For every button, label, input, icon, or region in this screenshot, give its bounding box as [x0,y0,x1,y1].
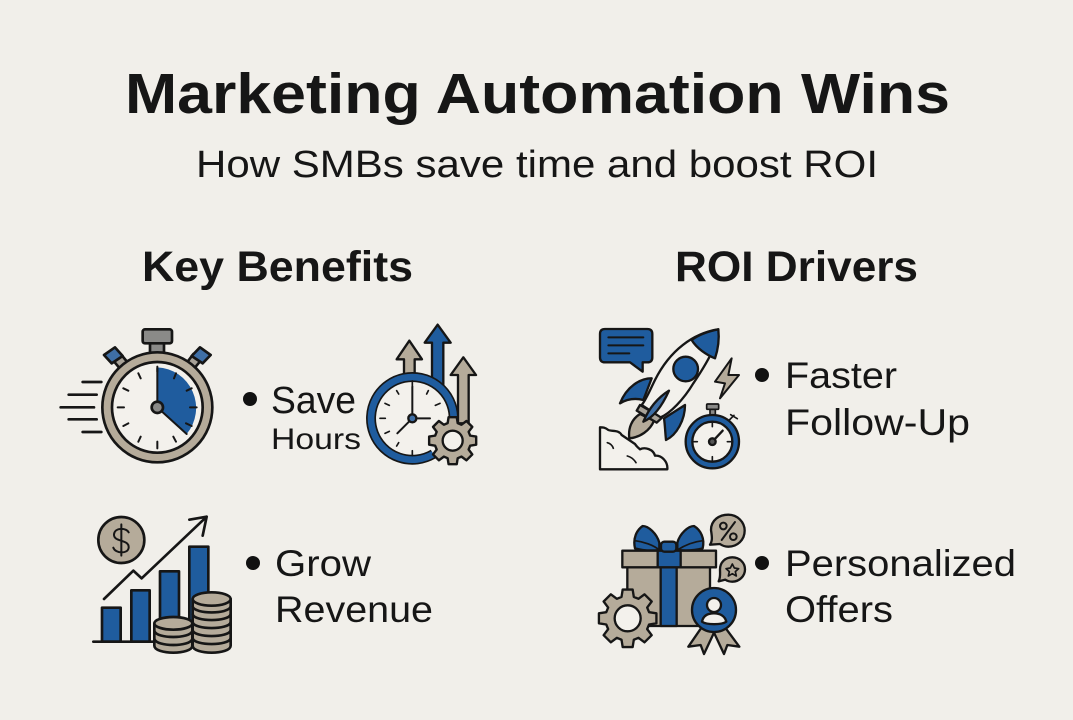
label: personalized: Personalized [785,543,1016,584]
label: grow: Grow [275,543,371,584]
icon: gift with gear and badge [599,515,745,654]
icon: stopwatch [61,329,212,462]
title: Marketing Automation Wins [125,62,950,126]
label: offers: Offers [785,589,893,630]
heading: key benefits: Key Benefits [142,243,413,291]
icon: revenue chart with coins [93,517,231,653]
heading: ROI drivers: ROI Drivers [675,243,918,291]
bullet: save hours [243,392,257,406]
label: follow-up: Follow-Up [785,402,970,443]
bullet: personalized offers [755,556,769,570]
bullet: faster follow-up [755,368,769,382]
label: revenue: Revenue [275,589,433,630]
icon: rocket with message and stopwatch [600,329,739,469]
label: save: Save [271,380,356,422]
icon: clock with arrows and gear [371,325,476,464]
label: faster: Faster [785,355,897,396]
label: hours: Hours [271,423,361,456]
subtitle: How SMBs save time and boost ROI [196,144,878,186]
bullet: grow revenue [246,556,260,570]
